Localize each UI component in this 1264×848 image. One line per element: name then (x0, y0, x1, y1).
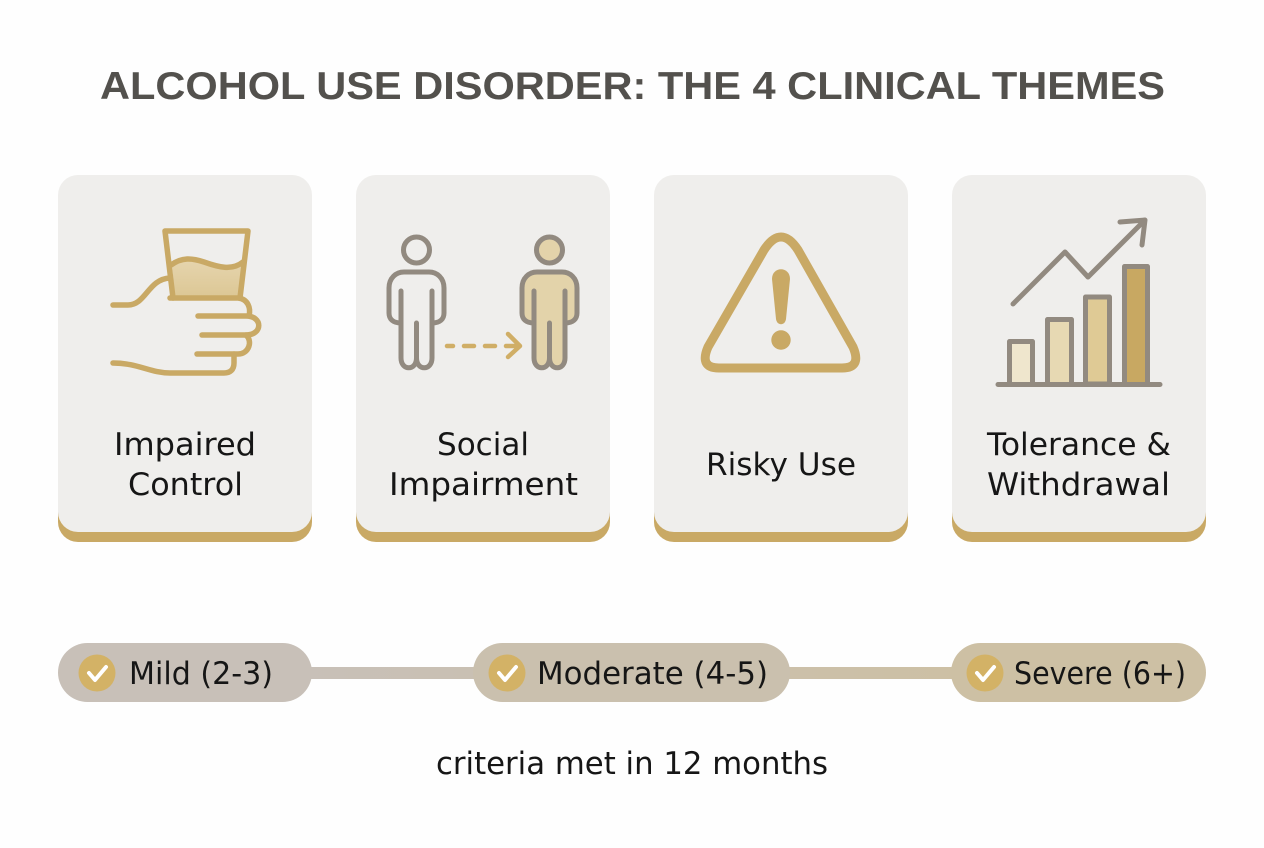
card background (654, 175, 908, 542)
label: social impairment: Social (437, 427, 529, 463)
card background (356, 175, 610, 542)
card background (952, 175, 1206, 542)
icon: outlined person (389, 237, 444, 368)
title: ALCOHOL USE DISORDER: THE 4 CLINICAL THEMES (100, 65, 1165, 108)
panel: risky use (654, 175, 908, 542)
label: tolerance and withdrawal: Tolerance & (986, 427, 1171, 463)
arrow: dashed transition (447, 334, 520, 357)
icon: warning triangle (705, 237, 856, 368)
pill: moderate: Moderate (4-5) (537, 656, 768, 692)
severity scale (58, 643, 1206, 702)
card background (58, 175, 312, 542)
icon: rising bar chart (998, 220, 1160, 384)
icon: hand holding glass (113, 231, 259, 373)
label: risky use: Risky Use (706, 447, 856, 483)
pill: severe (951, 643, 1206, 702)
panel: social impairment (356, 175, 610, 542)
label: tolerance and withdrawal: Withdrawal (987, 467, 1170, 503)
panel: impaired control (58, 175, 312, 542)
caption: criteria met in 12 months (436, 746, 828, 782)
pill: mild (58, 643, 312, 702)
connector line (300, 667, 970, 679)
pill: mild: Mild (2-3) (129, 656, 273, 692)
label: social impairment: Impairment (389, 467, 578, 503)
label: impaired control: Impaired (114, 427, 256, 463)
icon: filled person (522, 237, 577, 368)
label: impaired control: Control (128, 467, 243, 503)
panel: tolerance and withdrawal (952, 175, 1206, 542)
pill: severe: Severe (6+) (1014, 656, 1186, 692)
pill: moderate (473, 643, 790, 702)
